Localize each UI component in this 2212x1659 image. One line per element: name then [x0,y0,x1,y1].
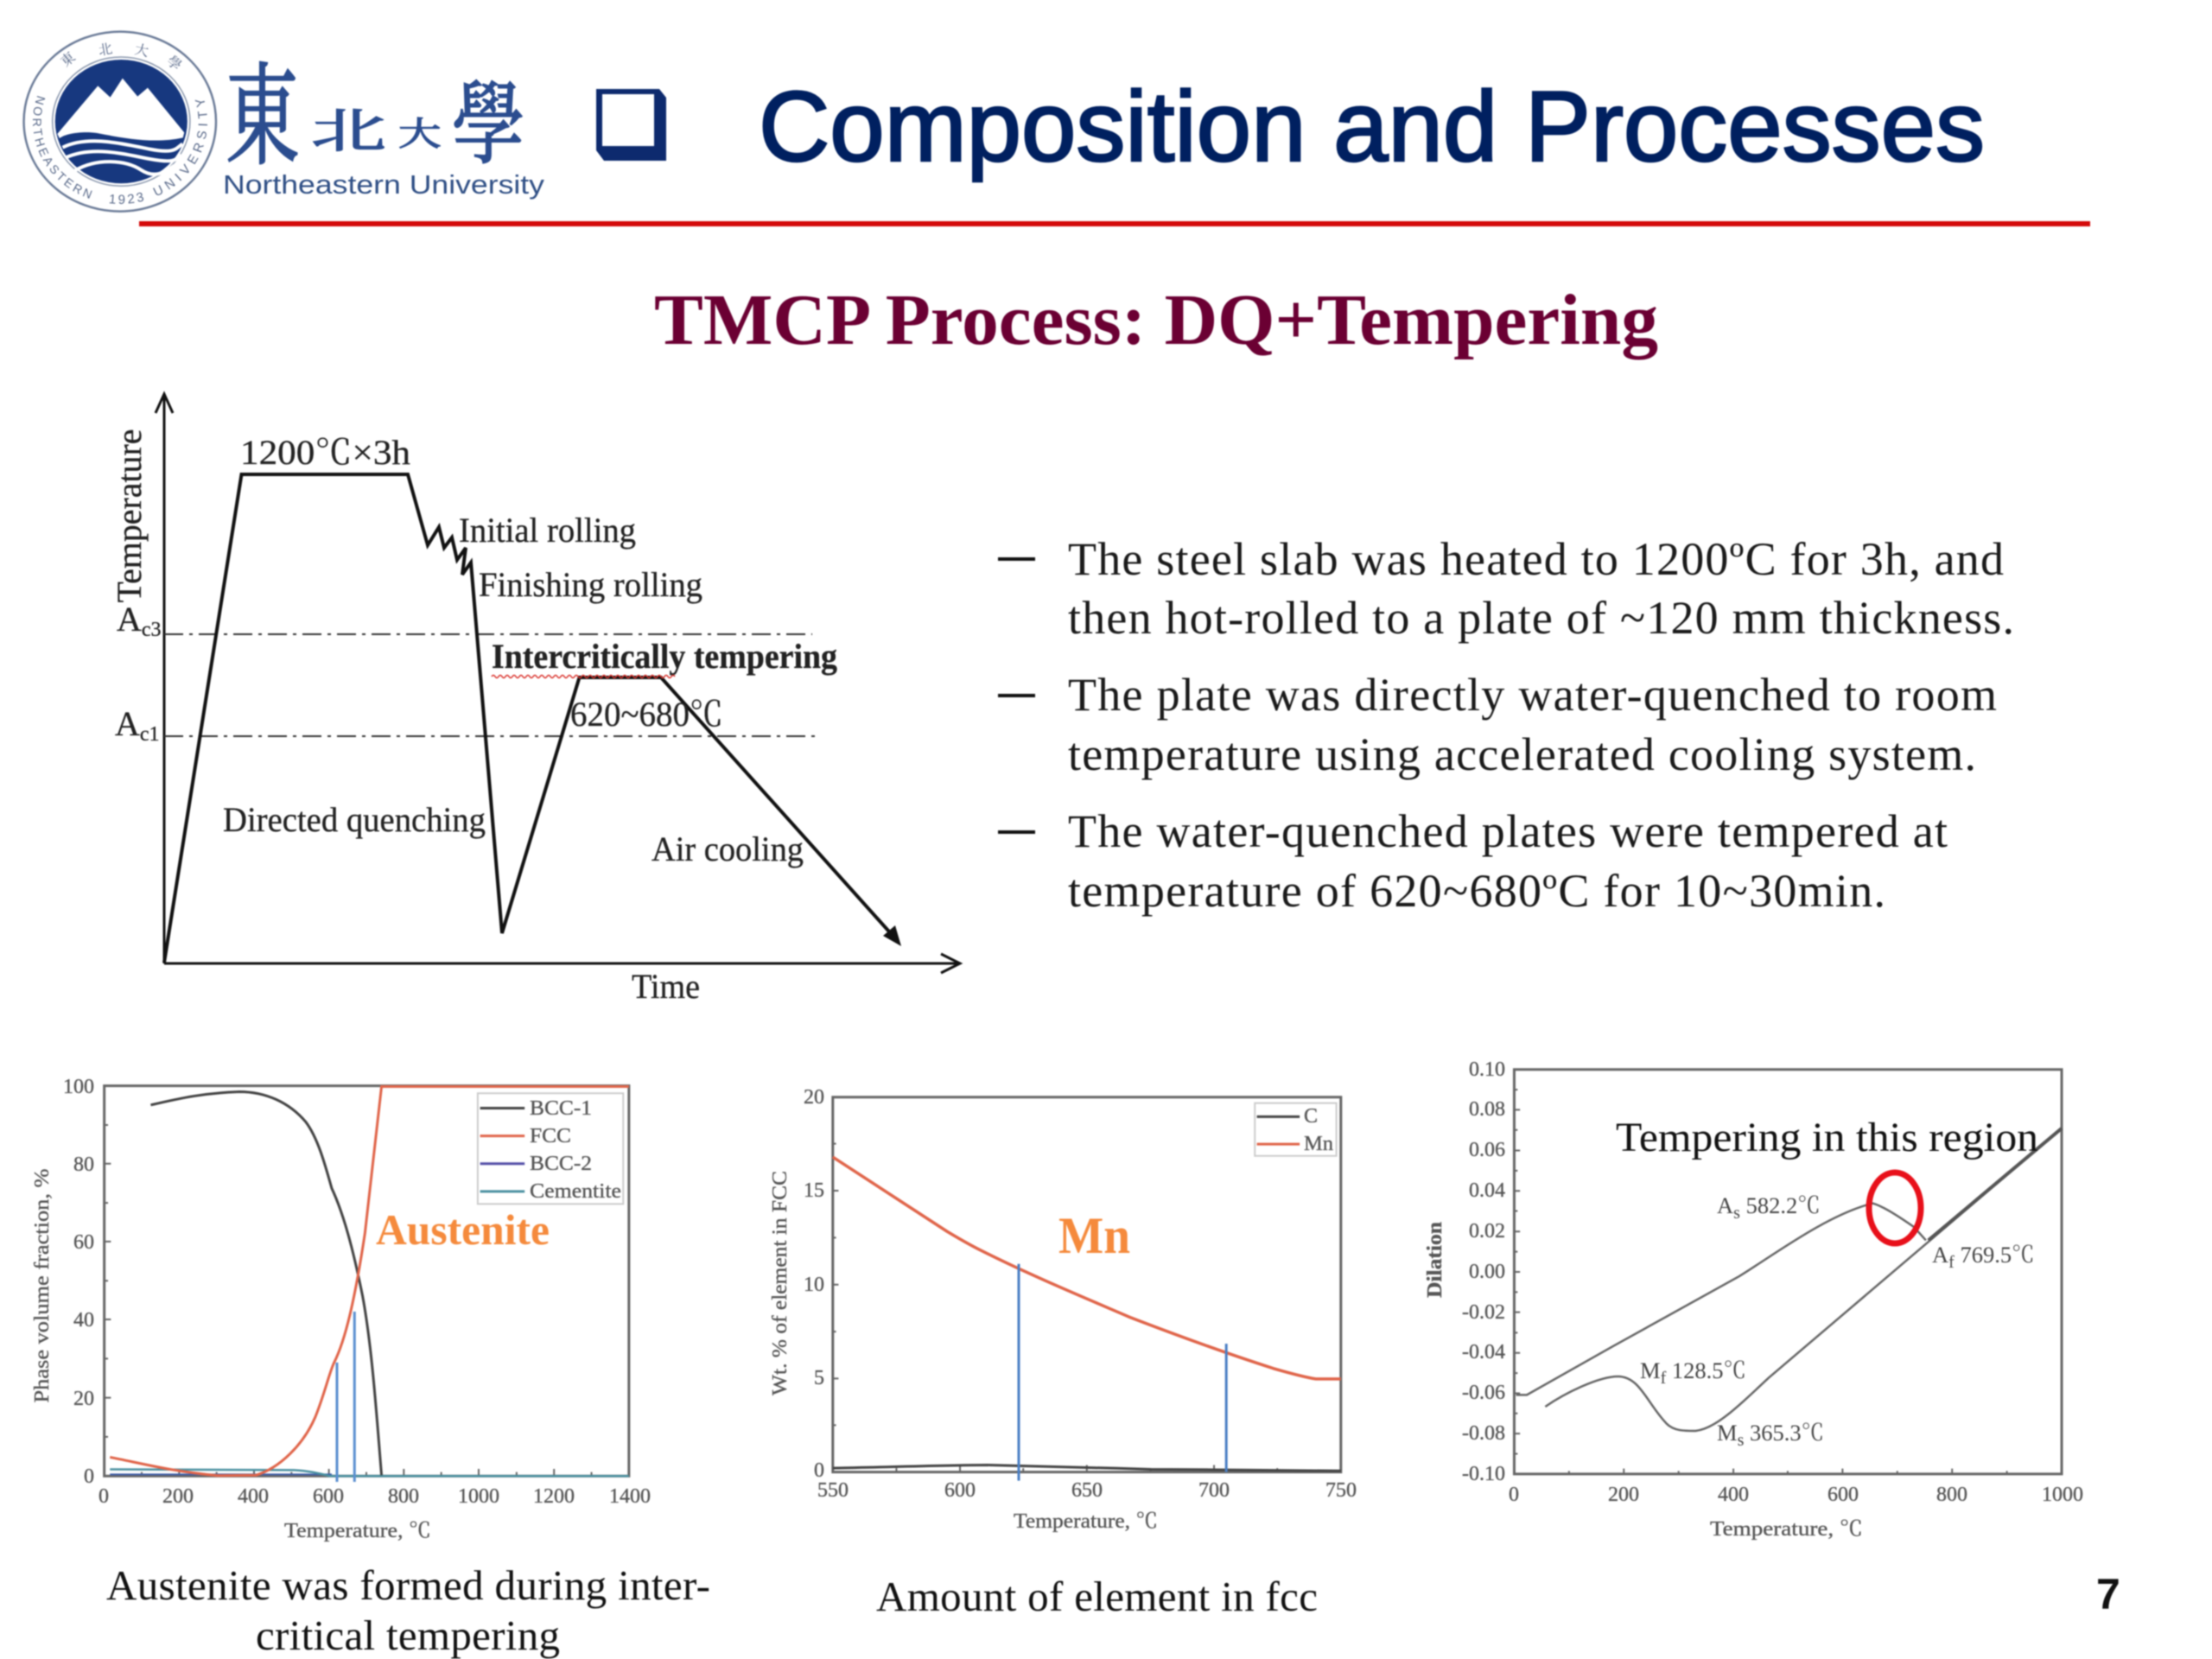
legend: BCC-1 [530,1097,592,1120]
logo: university name in calligraphy: 學 [452,76,524,175]
label: air cooling: Air cooling [652,830,804,868]
logo: university seal: 1923 [109,192,144,205]
icon: hollow square bullet [596,89,666,161]
point labels: 769.5℃ [1955,1242,2035,1268]
logo: university seal: 學 [163,53,184,73]
y axis tick labels [63,1076,94,1488]
y axis tick labels: 0.08 [1469,1098,1505,1121]
y axis title: Dilation [1424,1222,1446,1298]
logo: university seal: NORTHEASTERN [32,95,93,199]
x axis tick labels: 700 [1198,1479,1230,1502]
x axis tick labels: 400 [238,1485,269,1508]
red header rule [139,221,2090,226]
point labels: 128.5℃ [1666,1357,1746,1383]
bullet 3 [998,805,1948,917]
annotation: tempering region: Tempering in this region [1616,1115,2038,1160]
logo: university seal [22,29,218,213]
label: initial rolling: Initial rolling [459,511,636,550]
bullet 1: The steel slab was heated to 1200ºC for 3h, and [1068,533,2004,585]
x axis tick labels: 550 [817,1479,849,1502]
y axis tick labels: 0.10 [1469,1058,1505,1081]
x axis tick labels: 650 [1071,1479,1103,1502]
x axis tick labels: 1200 [533,1485,575,1508]
point labels: s [1733,1204,1740,1223]
point labels: s [1738,1431,1745,1450]
critical temperature labels: A [117,600,142,639]
caption: austenite: Austenite was formed during inter- [106,1561,710,1609]
x axis tick labels: 800 [388,1485,419,1508]
y axis tick labels: 80 [73,1154,94,1176]
y axis tick labels: 0 [814,1459,824,1482]
logo: university name in calligraphy [226,56,524,179]
x axis tick labels: 0 [1509,1484,1519,1506]
point labels: f [1661,1369,1667,1388]
legend [1304,1105,1333,1155]
bullet 1: then hot-rolled to a plate of ~120 mm thickness. [1068,592,2014,644]
y axis title: Phase volume fraction, % [31,1168,54,1403]
label: tempering range: 620~680℃ [570,695,723,734]
bullet 2: temperature using accelerated cooling system. [1068,728,1976,780]
label: quenching: Directed quenching [223,800,486,839]
y axis tick labels: 0 [84,1465,94,1488]
y axis tick labels: -0.02 [1462,1301,1505,1324]
process diagram [110,394,960,1006]
y axis tick labels [804,1086,824,1482]
point labels: M [1640,1357,1661,1383]
y axis tick labels: 40 [73,1309,94,1332]
bullet 3: temperature of 620~680ºC for 10~30min. [1068,865,1885,917]
critical temperature labels: c3 [142,619,162,641]
x axis tick labels: 800 [1936,1484,1967,1506]
logo: English university name: Northeastern University [223,169,545,200]
x axis tick labels: 600 [944,1479,976,1502]
y axis tick labels: 0.02 [1469,1220,1505,1243]
y axis tick labels: 100 [63,1076,94,1098]
point labels: A [1932,1242,1948,1268]
chart: dilation curve [1424,1058,2083,1541]
point labels: 582.2℃ [1740,1192,1821,1218]
bullet 3: The water-quenched plates were tempered at [1068,805,1948,857]
bullet 2 [998,669,1997,780]
point labels: M [1717,1420,1738,1446]
legend: FCC [530,1125,571,1147]
y axis tick labels: 0.00 [1469,1261,1505,1283]
y axis tick labels: 60 [73,1231,94,1254]
subtitle: TMCP Process: DQ+Tempering [654,280,1658,360]
x axis tick labels: 0 [99,1485,109,1508]
critical temperature labels [115,600,162,746]
x axis tick labels: 1000 [2042,1484,2083,1506]
y axis tick labels: -0.08 [1462,1422,1505,1445]
x axis tick labels: 200 [162,1485,194,1508]
logo: university seal: 北 [98,41,113,59]
y axis tick labels [1462,1058,1505,1485]
x axis tick labels: 600 [1827,1484,1859,1506]
x axis tick labels [1509,1484,2083,1506]
caption: austenite [106,1561,710,1659]
spell-check squiggle [492,676,675,677]
x axis tick labels [99,1485,651,1508]
legend: Mn [1304,1133,1333,1155]
logo: university seal: 東 [58,49,79,70]
y axis tick labels: 0.06 [1469,1139,1505,1161]
annotation: red ellipse [1869,1173,1921,1243]
critical temperature labels: c1 [140,723,160,746]
page number: 7 [2096,1570,2120,1618]
critical temperature labels: A [115,704,140,743]
diagram axis label: time: Time [632,967,700,1006]
y axis tick labels: 10 [804,1274,824,1296]
x axis tick labels: 1400 [609,1485,651,1508]
y axis tick labels: -0.10 [1462,1463,1505,1485]
legend [530,1097,621,1203]
y axis title: Wt. % of element in FCC [769,1171,791,1395]
x axis title: Temperature, ℃ [284,1520,431,1542]
annotation: austenite: Austenite [376,1205,550,1254]
y axis tick labels: -0.06 [1462,1382,1505,1404]
logo: university seal: 大 [133,41,150,60]
label: finishing rolling: Finishing rolling [479,565,702,604]
logo: university name in calligraphy: 東 [226,56,299,179]
legend: BCC-2 [530,1153,592,1175]
x axis tick labels: 600 [313,1485,344,1508]
x axis tick labels [817,1479,1357,1502]
chart: phase volume fraction [31,1076,651,1542]
y axis tick labels: -0.04 [1462,1341,1505,1363]
title: Composition and Processes [759,72,1985,182]
annotation: Mn: Mn [1058,1207,1130,1264]
chart: element amount in fcc [769,1086,1357,1533]
x axis tick labels: 1000 [458,1485,499,1508]
point labels: A [1717,1192,1733,1218]
label: intercritical tempering: Intercritically tempering [492,637,837,676]
point labels: 365.3℃ [1744,1420,1824,1446]
caption: austenite: critical tempering [256,1611,560,1659]
legend: Cementite [530,1180,621,1203]
y axis tick labels: 5 [814,1367,824,1389]
x axis tick labels: 750 [1325,1479,1357,1502]
y axis tick labels: 0.04 [1469,1179,1505,1202]
point labels: f [1948,1253,1955,1272]
x axis title: Temperature, ℃ [1014,1510,1158,1533]
caption: amount of element: Amount of element in fcc [876,1573,1318,1620]
bullet 1 [998,533,2014,644]
logo: university seal: UNIVERSITY [152,99,208,196]
y axis tick labels: 15 [804,1179,824,1202]
y axis tick labels: 20 [73,1388,94,1410]
x axis tick labels: 200 [1608,1484,1639,1506]
bullet list [998,533,2014,917]
diagram axis label: temperature: Temperature [110,429,149,603]
bullet 2: The plate was directly water-quenched to room [1068,669,1997,721]
x axis title: Temperature, ℃ [1710,1518,1863,1541]
logo: university name in calligraphy: 北 [311,105,386,157]
label: soak: 1200℃×3h [240,433,410,472]
point labels [1640,1192,2035,1450]
logo: university name in calligraphy: 大 [398,116,442,153]
y axis tick labels: 20 [804,1086,824,1109]
legend: C [1304,1105,1318,1128]
x axis tick labels: 400 [1718,1484,1749,1506]
